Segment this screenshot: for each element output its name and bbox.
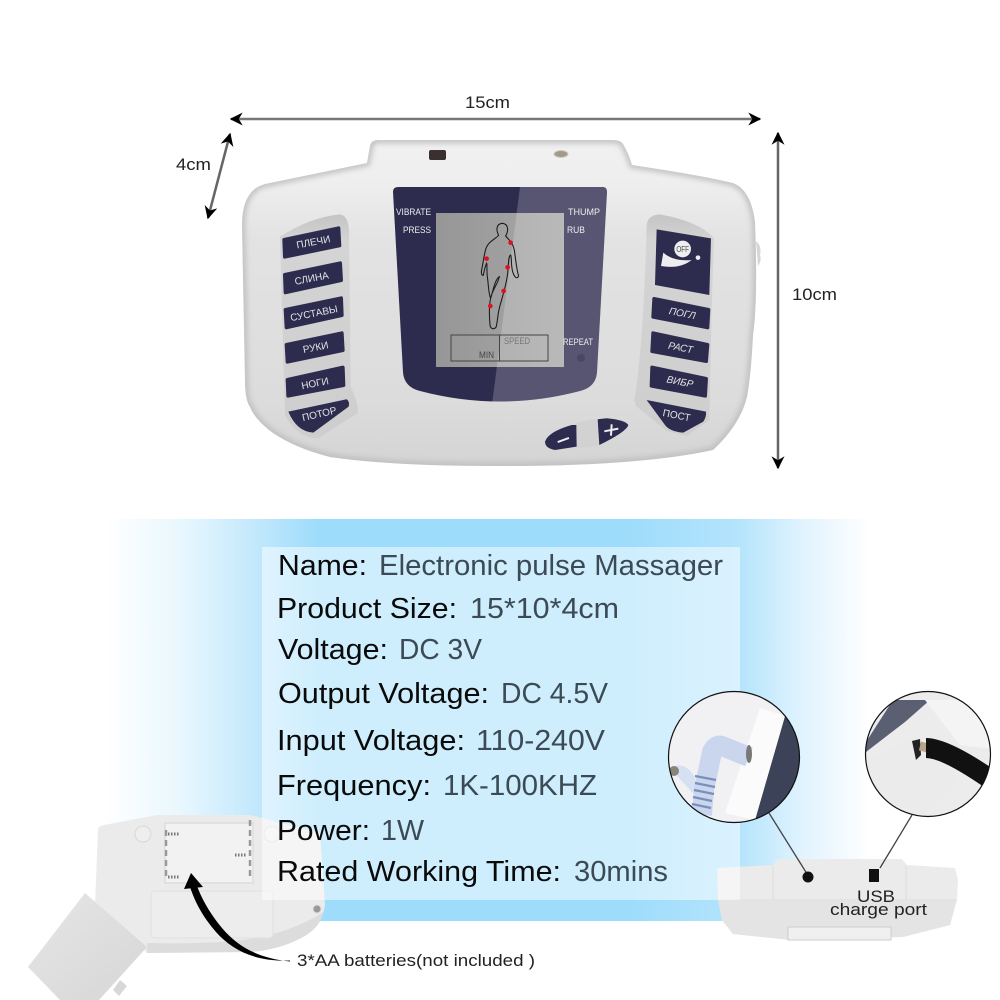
button НОГИ: НОГИ [301,376,330,392]
button ПЛЕЧИ: ПЛЕЧИ [296,234,331,251]
power button OFF: OFF [676,244,689,254]
mode label THUMP: THUMP [568,207,600,217]
spec: voltage [278,634,483,666]
width label: 15cm [465,93,510,112]
top USB port [429,150,446,160]
button ВИБР [651,367,706,396]
width dimension arrow [231,118,760,120]
jack socket [802,872,814,882]
mode label PRESS: PRESS [403,225,431,235]
button ПОСТ: ПОСТ [662,408,691,424]
spec: power [277,815,425,847]
button ПОТОР: ПОТОР [301,405,338,424]
height label: 10cm [792,285,837,304]
spec: rated working time: 30mins [574,856,668,888]
LCD display [436,213,564,367]
main massager device [242,140,761,466]
speed and minutes box [451,335,548,361]
curved arrow to batteries [184,873,290,962]
button ПОТОР [288,399,349,433]
side view device [717,859,958,940]
batteries note: 3*AA batteries(not included ) [297,951,535,970]
battery cover [28,893,147,1000]
button НОГИ [287,367,344,396]
cover tab [113,980,127,996]
screw hole circles [135,826,280,842]
right button column [545,214,714,450]
spec: input voltage: 110-240V [476,725,606,757]
button СПИНА: СЛИНА [294,270,330,288]
button ПОГЛ [653,299,709,328]
button СУСТАВЫ: СУСТАВЫ [290,304,339,324]
charge port label: charge port [830,900,927,919]
plus-minus rocker base [572,420,600,448]
spec: rated working time: Rated Working Time: [277,856,561,888]
button ПЛЕЧИ [284,228,340,257]
top jack socket [554,150,568,158]
height dimension arrow [777,133,779,468]
detail circle: jack plug [668,692,805,822]
side wheel [756,241,761,266]
depth label: 4cm [176,155,211,174]
spec: input voltage [277,725,606,757]
button РАСТ: РАСТ [667,341,695,356]
plus button [598,418,628,445]
button СПИНА [285,263,341,293]
button РУКИ [286,333,343,362]
left button column [280,214,358,438]
recess on rear [151,891,273,938]
depth dimension arrow [208,134,230,218]
button СУСТАВЫ [285,298,342,328]
spec: power: 1W [381,815,425,847]
spec: frequency: Frequency: [277,770,431,802]
REPEAT label: REPEAT [563,337,593,347]
leader line to USB [880,815,912,868]
spec: frequency [277,770,597,802]
screen panel [393,187,607,402]
USB label: USB [857,887,895,906]
button РУКИ: РУКИ [302,340,330,356]
spec: output voltage [278,678,609,710]
specification list [277,550,723,888]
speed and minutes box: SPEED [504,336,530,346]
battery compartment view [28,815,325,1000]
blue gradient band [105,519,870,921]
spec: voltage: DC 3V [399,634,483,666]
minus button [545,425,577,450]
spec: frequency: 1K-100KHZ [443,770,597,802]
body figure [481,223,519,329]
glossy reflection [492,187,607,402]
mode label RUB: RUB [567,225,585,235]
button ПОГЛ: ПОГЛ [668,306,697,322]
lower rim [147,912,323,953]
button РАСТ [652,333,708,361]
detail circle: USB plug [866,692,1000,816]
spec: output voltage: DC 4.5V [501,678,609,710]
spec: product size: 15*10*4cm [470,593,619,625]
device rear [95,815,325,953]
button ПОСТ [647,400,706,433]
leader line to jack [769,813,809,877]
spec: name: Electronic pulse Massager [379,550,723,582]
repeat indicator [577,354,585,362]
spec: voltage: Voltage: [278,634,388,666]
mode label VIBRATE: VIBRATE [396,207,431,217]
spec: output voltage: Output Voltage: [278,678,489,710]
spec: product size [277,593,619,625]
device body [242,140,756,466]
spec: power: Power: [277,815,370,847]
spec: product size: Product Size: [277,593,457,625]
translucent spec panel [262,547,740,900]
speed and minutes box: MIN [479,350,494,360]
power button OFF [655,229,711,295]
button ВИБР: ВИБР [666,374,694,390]
bottom slot [788,927,891,940]
rear hole [313,905,321,913]
spec: name: Name: [278,550,367,582]
battery bay [165,820,253,883]
spec: input voltage: Input Voltage: [277,725,465,757]
USB port [869,869,879,882]
spec: rated working time [277,856,668,888]
edge shading [242,140,756,466]
